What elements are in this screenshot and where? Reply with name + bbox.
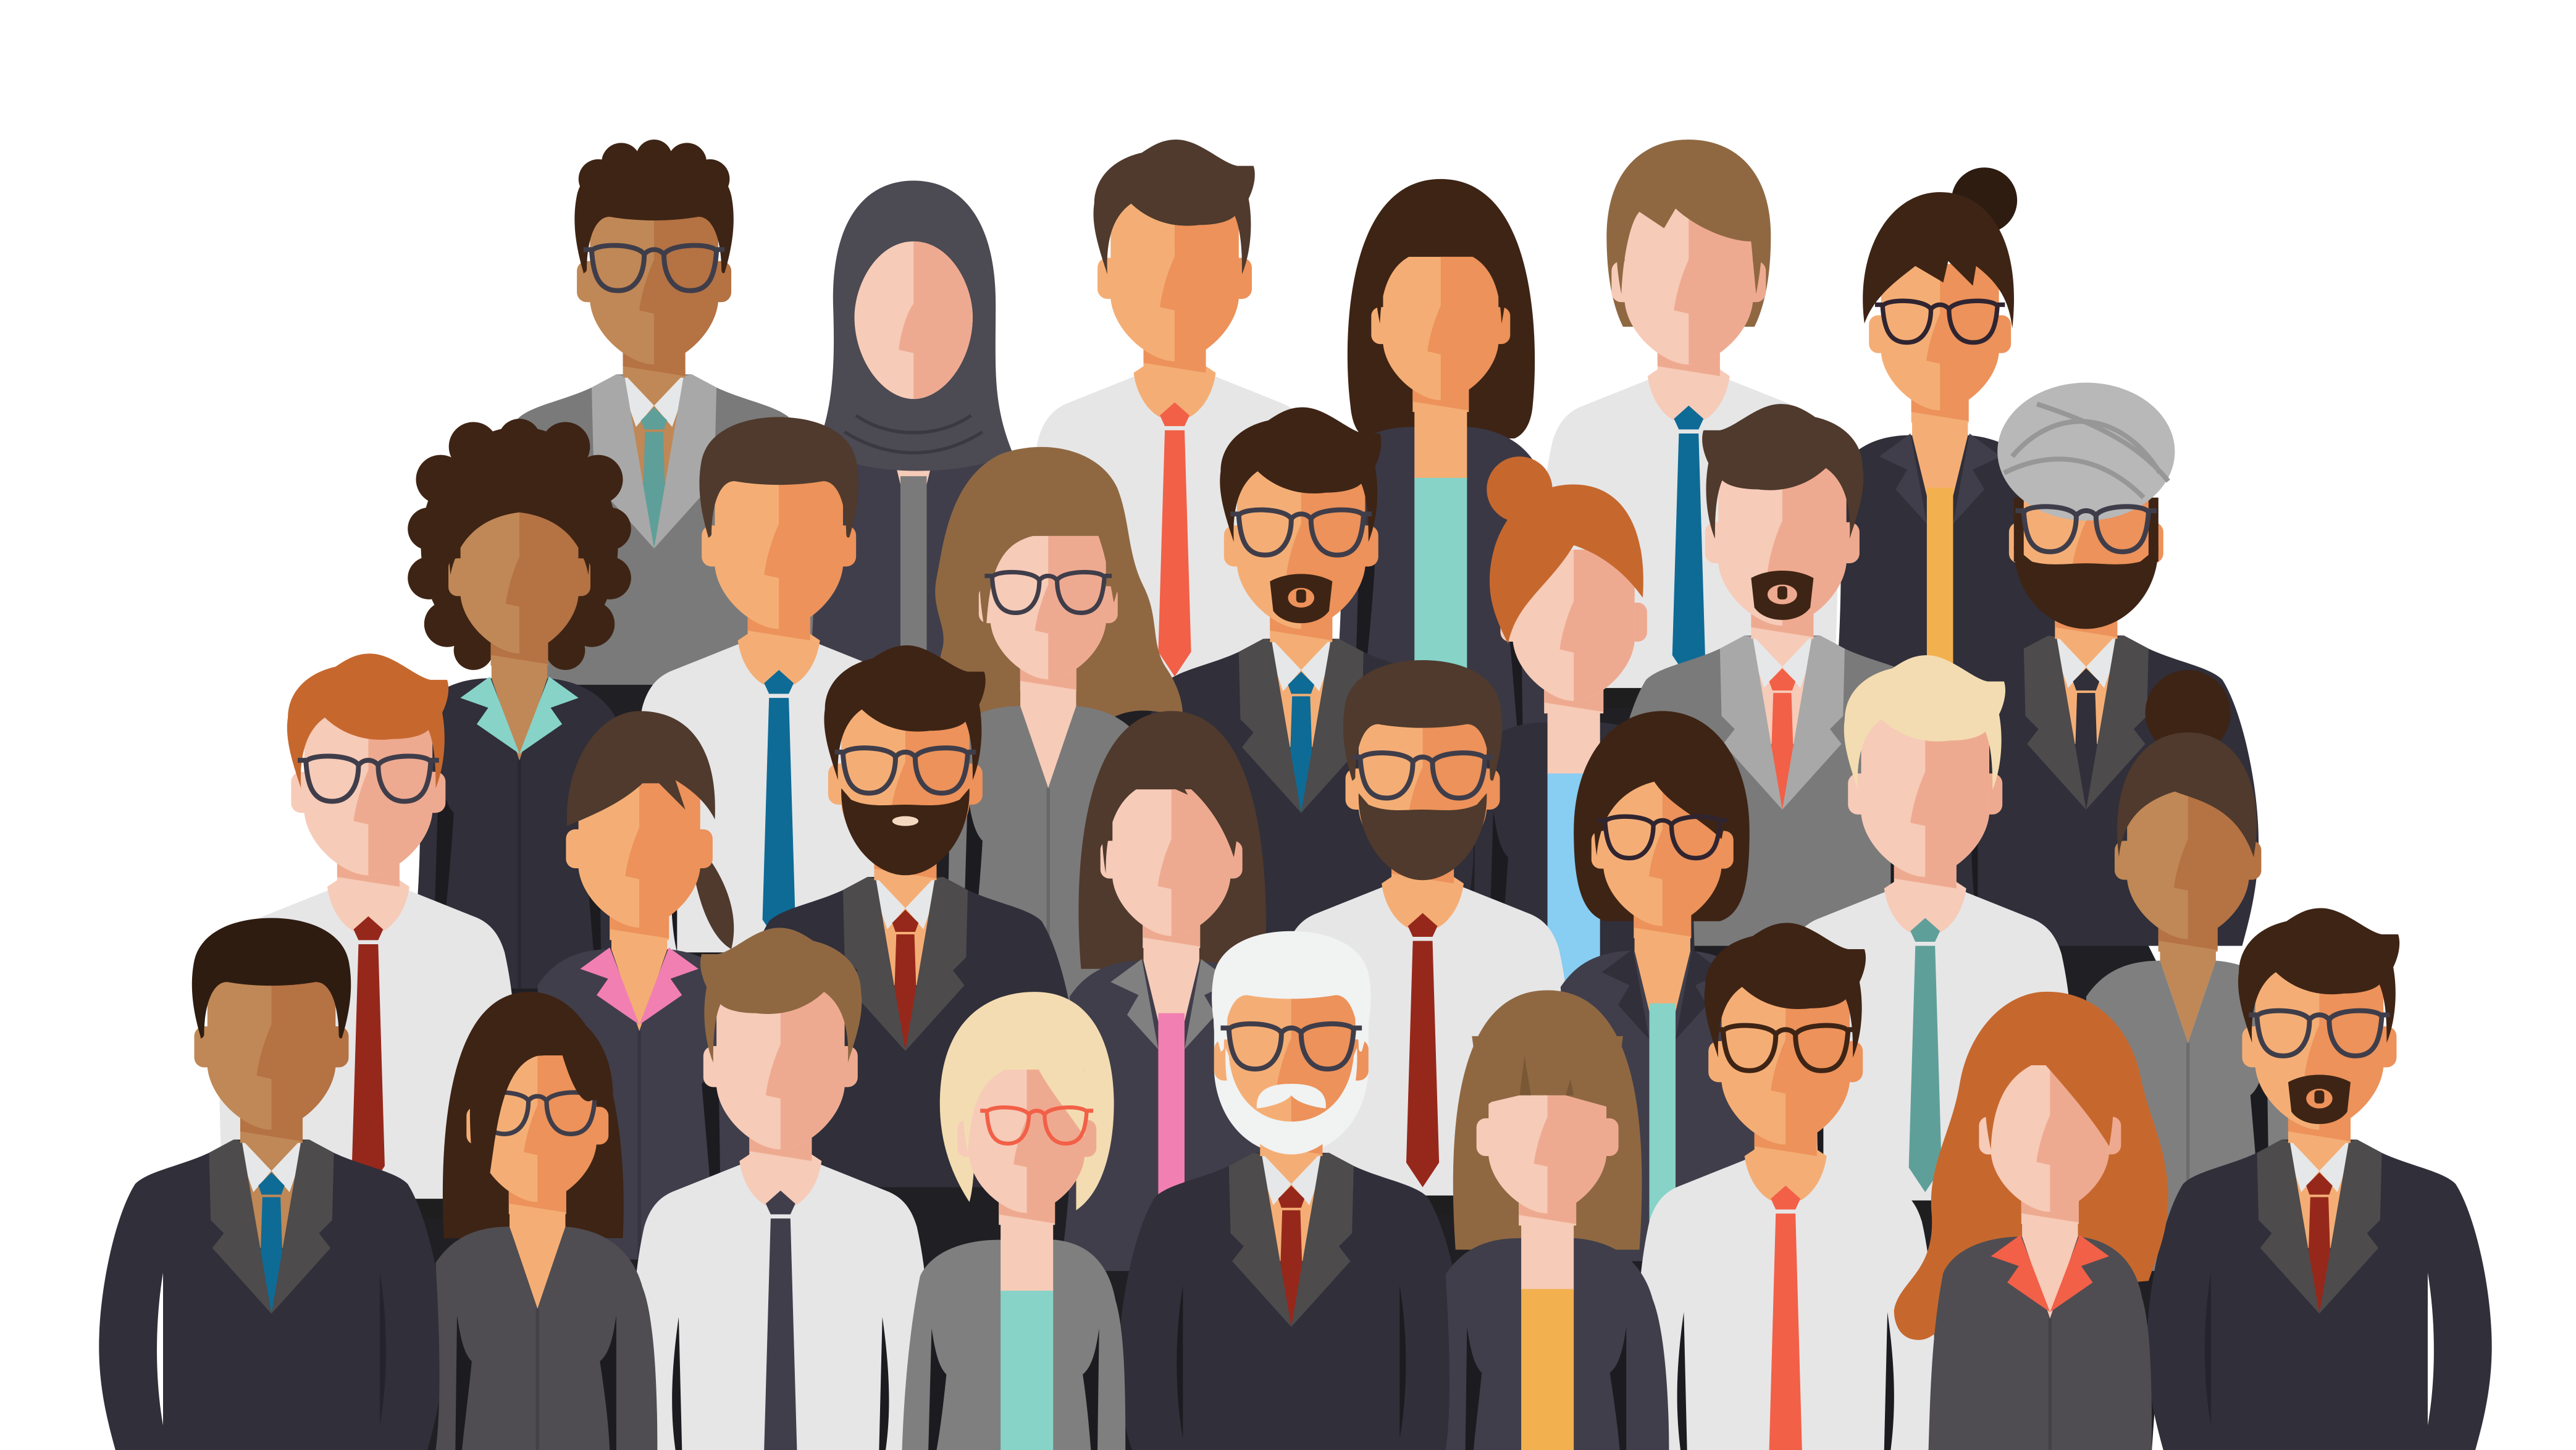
person: front left man with blue tie (99, 918, 444, 1450)
person: front man with brown hair and dark tie (632, 928, 929, 1450)
person: woman with ginger bun and light blue top, second row (1462, 456, 1695, 1033)
person: man with goatee and blue tie, second row (1129, 407, 1474, 949)
person: woman with long brown hair and pink top, third row (1060, 711, 1293, 1271)
person: bearded man with glasses, third row (733, 645, 1078, 1188)
person: front older man with white hair and moustache (1119, 931, 1464, 1450)
person: front man with glasses and orange tie (1637, 923, 1934, 1450)
person: front woman with long dark hair and glasses (435, 992, 657, 1450)
person: front woman with straight brown hair and fringe, yellow top (1446, 990, 1669, 1450)
person: front right man with goatee (2147, 908, 2492, 1450)
person: front blonde woman with red glasses and teal top (902, 992, 1125, 1450)
person: bearded man in white shirt, third row (1272, 660, 1574, 1215)
person: woman with hair bun and glasses, back row (1828, 167, 2062, 745)
person: woman with dark bob and glasses, third row (1551, 711, 1784, 1261)
person: man with blue tie, second row (628, 417, 930, 972)
person: woman with ponytail and pink collar, third row (527, 711, 761, 1260)
person: woman with long dark hair and teal top, back row (1329, 179, 1563, 737)
person: front woman with wavy red hair and orange collar (1894, 992, 2168, 1450)
person: man with turban and beard, second row (1914, 383, 2259, 946)
person: curly hair man with glasses, back row (482, 140, 826, 685)
person: man with goatee in grey suit, second row (1610, 404, 1955, 946)
person: woman with curly afro hair, second row (408, 419, 641, 989)
person: dark-skinned woman with bun, third row (2076, 670, 2309, 1271)
person: woman with long wavy brown hair and glasses, second row (935, 447, 1183, 1016)
person: woman in hijab, back row (802, 181, 1035, 734)
person: bob hair with blue tie, back row (1538, 140, 1840, 708)
dark backing between figures (395, 673, 2168, 1450)
person: ginger man with glasses, third row (217, 653, 519, 1218)
person: man with red-orange tie, back row (1023, 140, 1326, 705)
person: blond man with teal tie, third row (1774, 655, 2076, 1220)
